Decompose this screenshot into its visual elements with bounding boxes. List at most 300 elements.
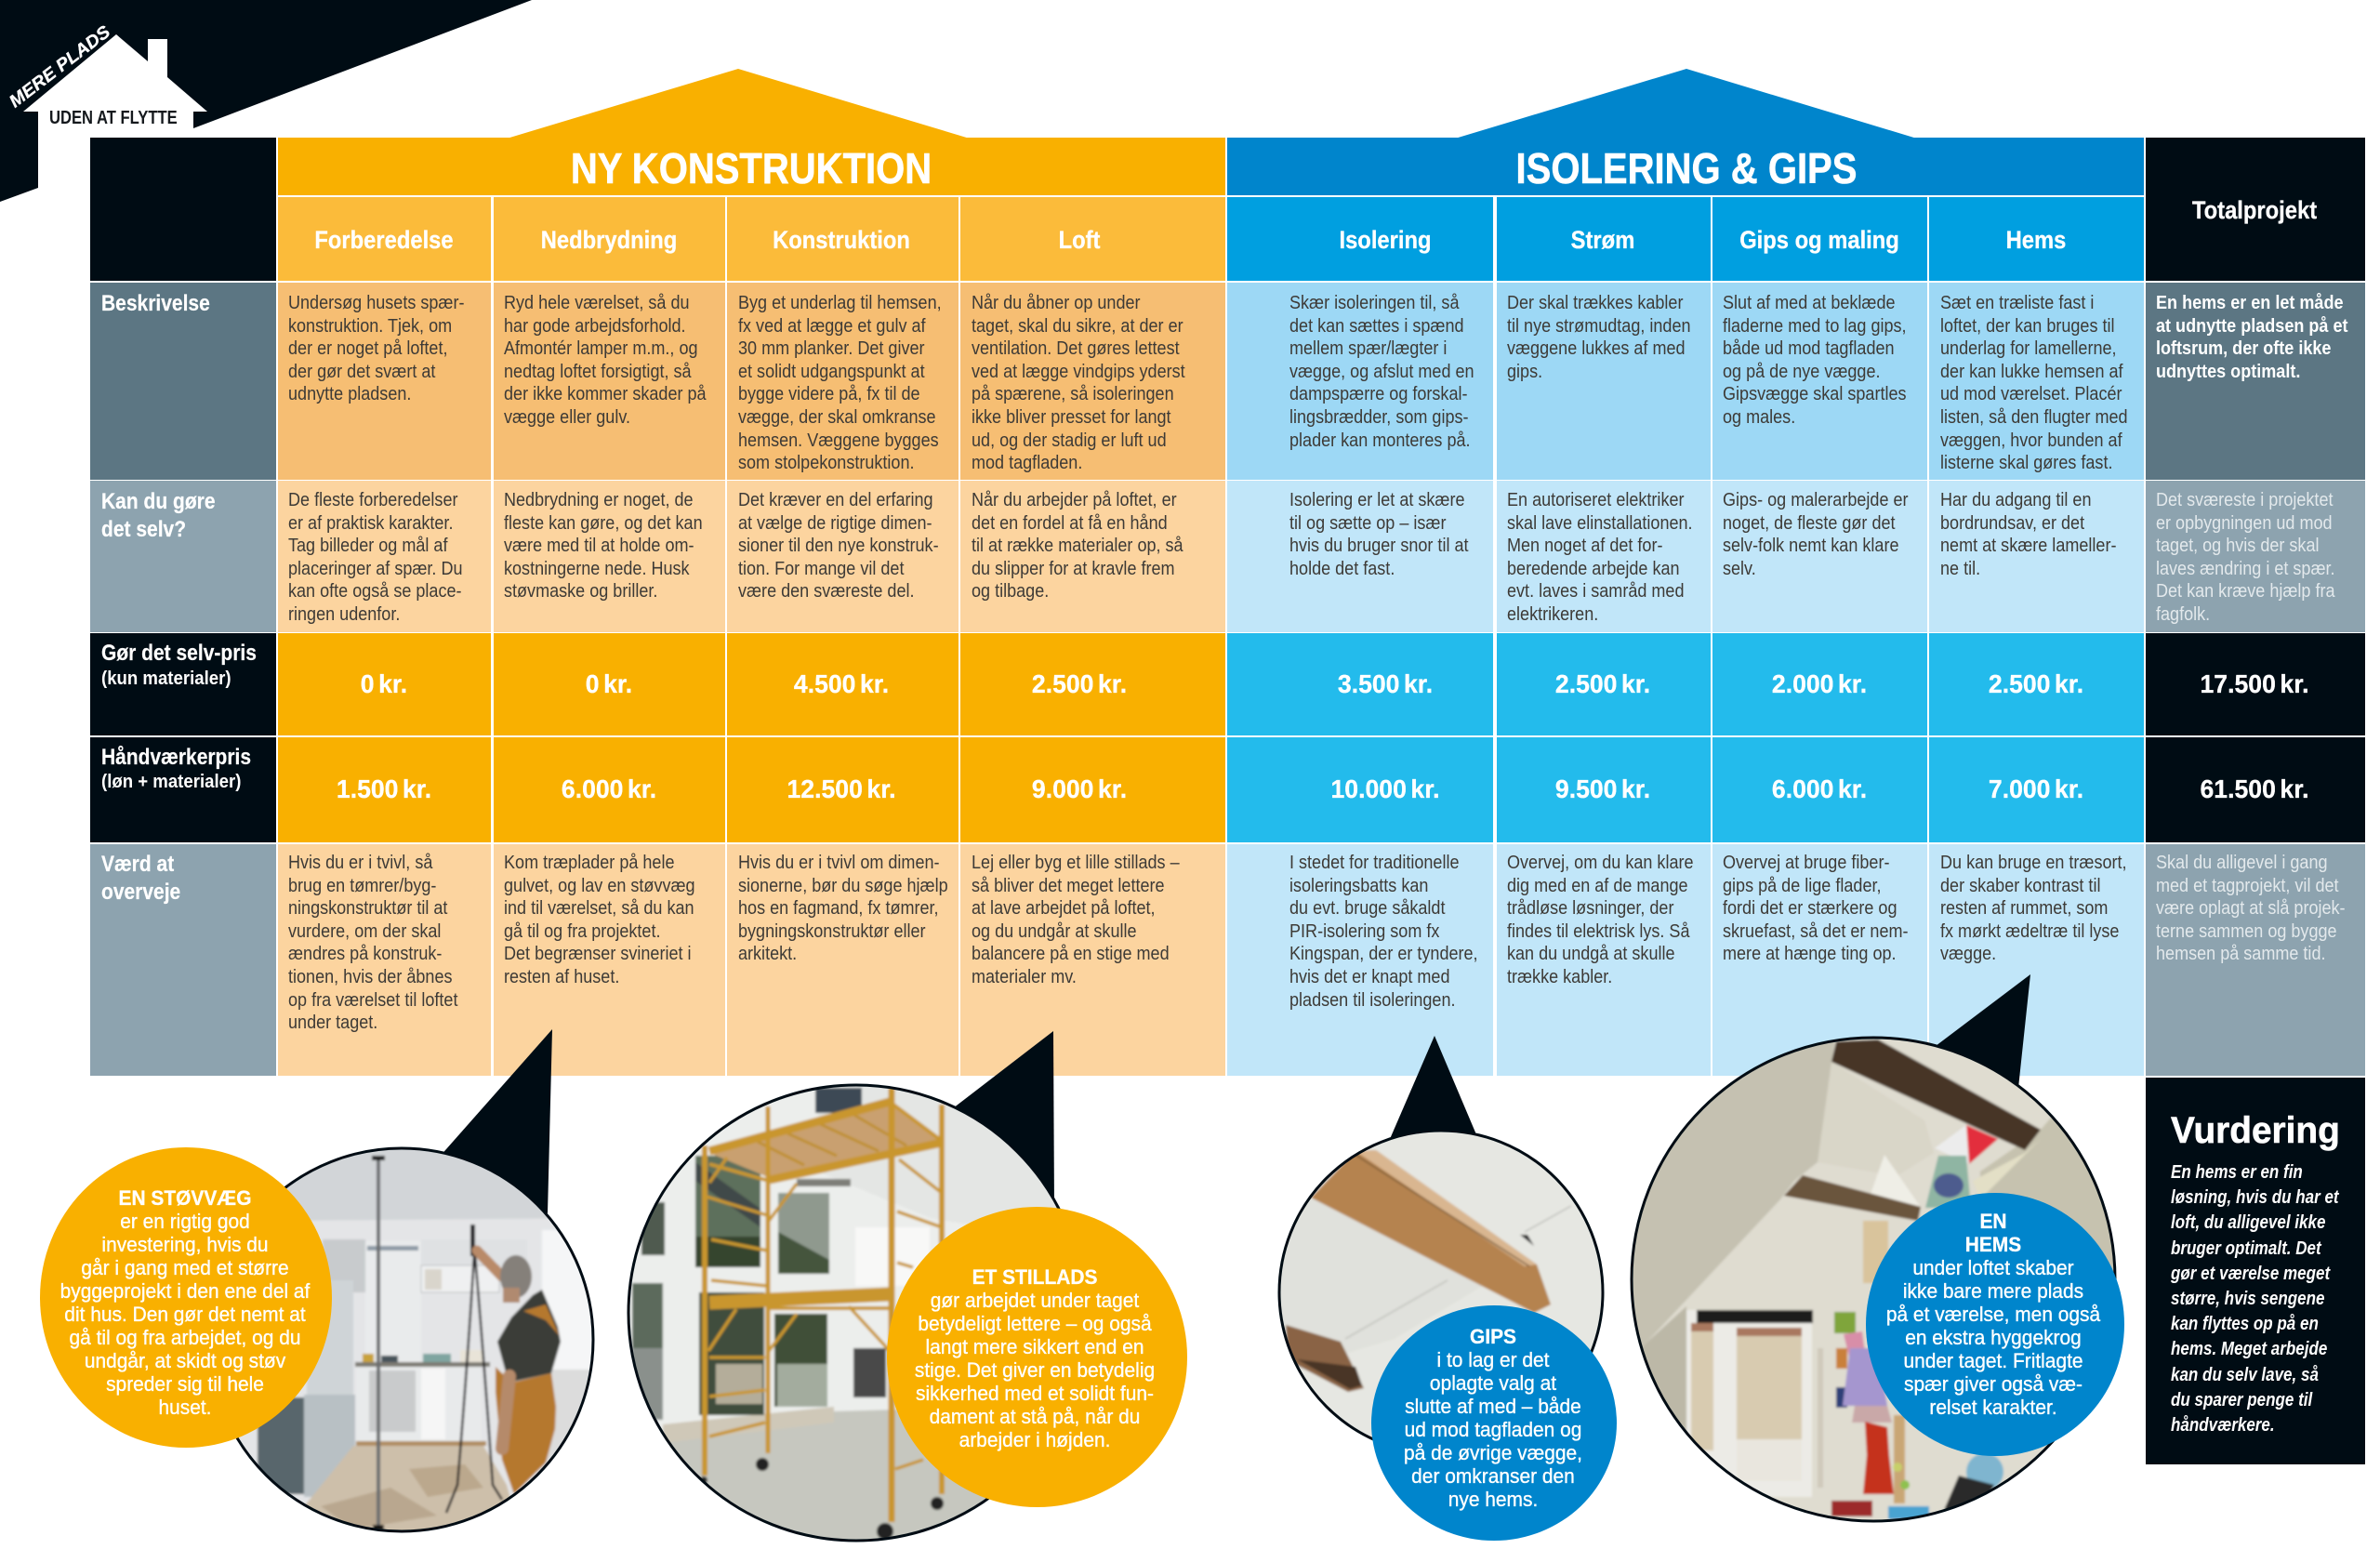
text: hems overveje <box>1929 844 2144 1076</box>
callout bubble: en hems: under loftet skaber <box>1912 1256 2074 1279</box>
price: strøm <box>1497 737 1711 842</box>
row label: beskrivelse <box>90 283 276 480</box>
text: konstruktion overveje: bygningskonstruktør eller <box>738 920 925 942</box>
text: forberedelse beskrivelse: udnytte pladsen. <box>288 383 411 404</box>
text: gips og maling overveje: Overvej at bruge fiber- <box>1723 852 1889 873</box>
banner: ny konstruktion <box>278 138 1225 195</box>
price: loft <box>960 633 1225 735</box>
callout bubble: en hems: relset karakter. <box>1929 1396 2057 1419</box>
text: loft overveje: så bliver det meget lettere <box>972 875 1165 896</box>
text: hems beskrivelse: listen, så den flugter med <box>1940 406 2128 428</box>
text: forberedelse beskrivelse: Undersøg husets spær- <box>288 292 465 313</box>
text: totalprojekt selv: fagfolk. <box>2156 603 2210 625</box>
text: nedbrydning overveje <box>493 844 725 1076</box>
text: vurdering verdict: gør et værelse meget <box>2171 1263 2330 1284</box>
text: gips og maling overveje: gips på de lige flader, <box>1723 875 1882 896</box>
text: vurdering verdict: håndværkere. <box>2171 1414 2275 1436</box>
text: forberedelse selv <box>278 481 491 632</box>
price: forberedelse <box>278 633 491 735</box>
price: gips og maling <box>1712 737 1926 842</box>
text: gips og maling overveje: mere at hænge ting op. <box>1723 943 1897 964</box>
roof: blue gable <box>1458 69 1913 138</box>
text: vurdering verdict: løsning, hvis du har et <box>2171 1186 2339 1208</box>
logo: mere plads house badge <box>0 0 532 202</box>
photo: loft room with exposed rafters <box>1627 1032 2124 1525</box>
row label: kan du gøre det selv: Kan du gøre <box>101 489 216 514</box>
heading: konstruktion: Konstruktion <box>773 226 910 254</box>
heading: strøm: Strøm <box>1571 226 1634 254</box>
text: nedbrydning overveje: gulvet, og lav en støvvæg <box>504 875 695 896</box>
price: total gør det selv <box>2146 633 2365 735</box>
text: loft selv: Når du arbejder på loftet, er <box>972 489 1177 510</box>
text: loft overveje: balancere på en stige med <box>972 943 1170 964</box>
text: strøm beskrivelse: Der skal trækkes kabler <box>1507 292 1683 313</box>
text: loft beskrivelse: ud, og der stadig er luft ud <box>972 430 1167 451</box>
text: totalprojekt beskrivelse: udnyttes optimalt. <box>2156 361 2300 382</box>
text: isolering overveje: I stedet for traditionelle <box>1289 852 1460 873</box>
text: isolering selv: Isolering er let at skære <box>1289 489 1464 510</box>
text: totalprojekt overveje <box>2146 844 2365 1076</box>
text: konstruktion selv: Det kræver en del erfaring <box>738 489 932 510</box>
text: vurdering verdict: loft, du alligevel ikke <box>2171 1211 2325 1233</box>
callout bubble: en støvvæg: dit hus. Den gør det nemt at <box>64 1303 306 1326</box>
text: loft overveje <box>960 844 1225 1076</box>
text: konstruktion beskrivelse: et solidt udgangspunkt at <box>738 361 924 382</box>
callout bubble: et stillads: betydeligt lettere – og også <box>918 1312 1152 1335</box>
text: strøm beskrivelse: væggene lukkes af med <box>1507 338 1686 359</box>
text: konstruktion beskrivelse: hemsen. Væggene bygges <box>738 430 938 451</box>
text: forberedelse overveje: tionen, hvis der åbnes <box>288 966 453 987</box>
text: totalprojekt overveje: Skal du alligevel i gang <box>2156 852 2328 873</box>
text: gips og maling overveje: fordi det er stærkere og <box>1723 897 1897 919</box>
heading: isolering <box>1227 197 1493 281</box>
text: konstruktion selv: at vælge de rigtige dimen- <box>738 512 932 534</box>
heading: nedbrydning: Nedbrydning <box>541 226 677 254</box>
text: loft beskrivelse: ikke bliver presset for langt <box>972 406 1171 428</box>
text: totalprojekt selv: Det kan kræve hjælp fra <box>2156 580 2335 602</box>
text: strøm beskrivelse <box>1497 283 1711 480</box>
text: strøm selv <box>1497 481 1711 632</box>
heading: gips og maling: Gips og maling <box>1739 226 1899 254</box>
callout bubble: gips: ud mod tagfladen og <box>1404 1418 1581 1441</box>
price: forberedelse <box>278 737 491 842</box>
photo: dust wall and worker <box>238 1149 591 1530</box>
text: nedbrydning beskrivelse: har gode arbejdsforhold. <box>504 315 686 337</box>
photo callouts <box>236 974 2116 1542</box>
text: hems selv <box>1929 481 2144 632</box>
text: strøm selv: elektrikeren. <box>1507 603 1598 625</box>
text: totalprojekt overveje: være oplagt at slå projek- <box>2156 897 2346 919</box>
heading: strøm <box>1497 197 1711 281</box>
heading: forberedelse: Forberedelse <box>314 226 454 254</box>
text: vurdering verdict: kan du selv lave, så <box>2171 1364 2319 1385</box>
text: strøm selv: evt. laves i samråd med <box>1507 580 1685 602</box>
text: vurdering verdict <box>2171 1161 2339 1436</box>
text: konstruktion overveje: sionerne, bør du søge hjælp <box>738 875 947 896</box>
text: nedbrydning beskrivelse: Afmontér lamper m.m., og <box>504 338 698 359</box>
text: nedbrydning overveje: ind til værelset, så du kan <box>504 897 694 919</box>
text: isolering selv <box>1227 481 1493 632</box>
banner: isolering og gips: ISOLERING & GIPS <box>1515 143 1857 192</box>
text: hems beskrivelse: loftet, der kan bruges til <box>1940 315 2115 337</box>
price: hems: 7.000 kr. <box>1989 774 2083 803</box>
photo outline: scaffold <box>628 1085 1084 1541</box>
text: konstruktion beskrivelse: som stolpekonstruktion. <box>738 452 914 473</box>
text: isolering overveje: hvis det er knapt med <box>1289 966 1449 987</box>
row: kan du gøre det selv <box>90 481 2365 632</box>
text: hems beskrivelse <box>1929 283 2144 480</box>
text: hems overveje: resten af rummet, som <box>1940 897 2108 919</box>
price: loft: 2.500 kr. <box>1032 669 1127 698</box>
text: forberedelse beskrivelse: der gør det svært at <box>288 361 435 382</box>
text: nedbrydning beskrivelse: nedtag loftet forsigtigt, så <box>504 361 692 382</box>
callout bubble: et stillads: dament at stå på, når du <box>930 1405 1140 1428</box>
callout bubble: et stillads: sikkerhed med et solidt fun- <box>916 1382 1154 1405</box>
text: strøm overveje: kan du undgå at skulle <box>1507 943 1675 964</box>
text: totalprojekt selv: laves ændring i et spær. <box>2156 558 2335 579</box>
text: nedbrydning overveje: gå til og fra projektet. <box>504 920 660 942</box>
text: loft selv: du slipper for at kravle frem <box>972 558 1175 579</box>
callout bubble: en støvvæg <box>40 1147 332 1448</box>
text: strøm overveje: trådløse løsninger, der <box>1507 897 1673 919</box>
price: loft <box>960 737 1225 842</box>
text: isolering beskrivelse: lingsbrædder, som gips- <box>1289 406 1469 428</box>
price: nedbrydning <box>493 737 725 842</box>
callout bubble: en støvvæg: går i gang med et større <box>81 1256 289 1279</box>
text: isolering beskrivelse: Skær isoleringen til, så <box>1289 292 1459 313</box>
callout bubble: gips: på de øvrige vægge, <box>1404 1441 1581 1464</box>
price: gips og maling: 2.000 kr. <box>1772 669 1867 698</box>
price: forberedelse: 1.500 kr. <box>337 774 431 803</box>
text: loft selv: og tilbage. <box>972 580 1049 602</box>
text: vurdering verdict: kan flyttes op på en <box>2171 1313 2319 1334</box>
text: loft beskrivelse: Når du åbner op under <box>972 292 1141 313</box>
text: forberedelse overveje: under taget. <box>288 1012 377 1033</box>
text: isolering overveje: Kingspan, der er tyndere, <box>1289 943 1478 964</box>
text: nedbrydning selv: støvmaske og briller. <box>504 580 657 602</box>
text: hems overveje: fx mørkt ædeltræ til lyse <box>1940 920 2119 942</box>
price: forberedelse: 0 kr. <box>361 669 407 698</box>
price: loft: 9.000 kr. <box>1032 774 1127 803</box>
text: totalprojekt beskrivelse: loftsrum, der ofte ikke <box>2156 338 2331 359</box>
price: isolering: 10.000 kr. <box>1331 774 1439 803</box>
text: hems beskrivelse: ud mod værelset. Placér <box>1940 383 2122 404</box>
roof: orange gable <box>509 69 967 138</box>
text: nedbrydning overveje: Kom træplader på hele <box>504 852 675 873</box>
text: strøm overveje: dig med en af de mange <box>1507 875 1688 896</box>
text: gips og maling overveje <box>1712 844 1926 1076</box>
heading: isolering: Isolering <box>1339 226 1432 254</box>
text: forberedelse selv: ringen udenfor. <box>288 603 400 625</box>
text: forberedelse overveje: brug en tømrer/byg- <box>288 875 436 896</box>
text: forberedelse overveje: ændres på konstruk- <box>288 943 442 964</box>
text: loft selv: til at række materialer op, så <box>972 535 1183 556</box>
heading: loft: Loft <box>1059 226 1100 254</box>
text: hems selv: bordrundsav, er det <box>1940 512 2084 534</box>
text: loft overveje: og du undgår at skulle <box>972 920 1137 942</box>
text: loft selv: det en fordel at få en hånd <box>972 512 1168 534</box>
callout bubble: en hems <box>1866 1193 2124 1456</box>
text: loft selv <box>960 481 1225 632</box>
text: konstruktion selv: sioner til den nye konstruk- <box>738 535 938 556</box>
price: konstruktion: 12.500 kr. <box>787 774 895 803</box>
banner: ny konstruktion: NY KONSTRUKTION <box>571 143 932 192</box>
row label: kan du gøre det selv: det selv? <box>101 517 186 542</box>
callout bubble: et stillads: arbejder i højden. <box>959 1428 1110 1451</box>
text: gips og maling selv: Gips- og malerarbejde er <box>1723 489 1909 510</box>
text: isolering beskrivelse: det kan sættes i spænd <box>1289 315 1464 337</box>
text: konstruktion overveje: arkitekt. <box>738 943 797 964</box>
text: strøm overveje: trække kabler. <box>1507 966 1612 987</box>
pointer: hems <box>1936 974 2030 1088</box>
text: forberedelse selv: De fleste forberedelser <box>288 489 458 510</box>
text: strøm beskrivelse: gips. <box>1507 361 1542 382</box>
text: forberedelse beskrivelse <box>278 283 491 480</box>
text: totalprojekt overveje: hemsen på samme tid. <box>2156 943 2325 964</box>
price: hems: 2.500 kr. <box>1989 669 2083 698</box>
text: hems overveje: der skaber kontrast til <box>1940 875 2100 896</box>
text: hems overveje: vægge. <box>1940 943 1996 964</box>
callout bubble: en støvvæg: gå til og fra arbejdet, og du <box>70 1326 300 1349</box>
text: isolering beskrivelse: mellem spær/lægter i <box>1289 338 1447 359</box>
callout bubble: en hems: HEMS <box>1965 1233 2021 1256</box>
text: isolering selv: hvis du bruger snor til at <box>1289 535 1469 556</box>
callout bubble: en støvvæg: byggeprojekt i den ene del af <box>60 1279 310 1303</box>
text: gips og maling beskrivelse: og males. <box>1723 406 1795 428</box>
text: hems beskrivelse: Sæt en træliste fast i <box>1940 292 2094 313</box>
text: totalprojekt overveje: med et tagprojekt, vil det <box>2156 875 2339 896</box>
text: loft beskrivelse: mod tagfladen. <box>972 452 1082 473</box>
photo: scaffold in white room <box>630 1086 1057 1540</box>
column heading: totalprojekt: Totalprojekt <box>2192 196 2317 224</box>
text: totalprojekt selv: taget, og hvis der skal <box>2156 535 2319 556</box>
text: gips og maling beskrivelse <box>1712 283 1926 480</box>
text: hems beskrivelse: væggen, hvor bunden af <box>1940 430 2122 451</box>
text: isolering overveje: PIR-isolering som fx <box>1289 920 1439 942</box>
text: konstruktion overveje: hos en fagmand, fx tømrer, <box>738 897 938 919</box>
callout bubble: gips: GIPS <box>1469 1325 1516 1348</box>
row label: gør det selv-pris: (kun materialer) <box>101 669 231 689</box>
text: konstruktion beskrivelse <box>727 283 959 480</box>
text: vurdering verdict: bruger optimalt. Det <box>2171 1238 2321 1259</box>
price: gips og maling: 6.000 kr. <box>1772 774 1867 803</box>
heading: nedbrydning <box>493 197 725 281</box>
text: isolering overveje: du evt. bruge såkaldt <box>1289 897 1445 919</box>
text: forberedelse beskrivelse: konstruktion. Tjek, om <box>288 315 452 337</box>
text: forberedelse overveje: ningskonstruktør til at <box>288 897 447 919</box>
price: hems <box>1929 633 2144 735</box>
pointer: gips <box>1390 1036 1478 1139</box>
row label: beskrivelse: Beskrivelse <box>101 291 210 316</box>
text: gips og maling beskrivelse: Gipsvægge skal spartles <box>1723 383 1907 404</box>
price: total gør det selv: 17.500 kr. <box>2201 669 2308 698</box>
callout bubble: en hems: en ekstra hyggekrog <box>1905 1326 2082 1349</box>
text: isolering beskrivelse: dampspærre og forskal- <box>1289 383 1468 404</box>
text: totalprojekt beskrivelse: En hems er en let måde <box>2156 292 2344 313</box>
text: loft beskrivelse: taget, skal du sikre, at der er <box>972 315 1183 337</box>
price: konstruktion <box>727 737 959 842</box>
price: strøm: 9.500 kr. <box>1555 774 1650 803</box>
callout bubble: et stillads: ET STILLADS <box>972 1265 1097 1289</box>
price: konstruktion <box>727 633 959 735</box>
row: håndværkerpris <box>90 737 2365 842</box>
text: nedbrydning selv: fleste kan gøre, og det kan <box>504 512 703 534</box>
callout bubble: gips: nye hems. <box>1448 1488 1538 1511</box>
callout bubble: en hems: under taget. Fritlagte <box>1903 1349 2083 1372</box>
row: column headers <box>278 197 2144 281</box>
callout bubble: en støvvæg: spreder sig til hele <box>106 1372 264 1396</box>
text: gips og maling selv: noget, de fleste gør det <box>1723 512 1896 534</box>
text: forberedelse overveje: vurdere, om der skal <box>288 920 441 942</box>
heading: vurdering: Vurdering <box>2171 1110 2340 1151</box>
text: gips og maling selv <box>1712 481 1926 632</box>
price: nedbrydning <box>493 633 725 735</box>
photo outline: loft room <box>1632 1038 2115 1521</box>
text: konstruktion selv <box>727 481 959 632</box>
text: gips og maling beskrivelse: både ud mod tagfladen <box>1723 338 1895 359</box>
text: gips og maling selv: selv-folk nemt kan klare <box>1723 535 1899 556</box>
price: total håndværker: 61.500 kr. <box>2201 774 2308 803</box>
text: hems beskrivelse: underlag for lamellerne, <box>1940 338 2117 359</box>
text: strøm overveje: findes til elektrisk lys. Så <box>1507 920 1690 942</box>
price: hems <box>1929 737 2144 842</box>
text: isolering selv: holde det fast. <box>1289 558 1395 579</box>
text: konstruktion overveje: Hvis du er i tvivl om dimen- <box>738 852 939 873</box>
text: forberedelse selv: Tag billeder og mål af <box>288 535 447 556</box>
row label: værd at overveje: Værd at <box>101 852 174 877</box>
heading: forberedelse <box>278 197 491 281</box>
text: hems beskrivelse: listerne skal gøres fast. <box>1940 452 2112 473</box>
price: strøm: 2.500 kr. <box>1555 669 1650 698</box>
text: forberedelse selv: er af praktisk karakter. <box>288 512 453 534</box>
callout bubble: en støvvæg: huset. <box>158 1396 211 1419</box>
text: totalprojekt selv: er opbygningen ud mod <box>2156 512 2333 534</box>
text: vurdering verdict: du sparer penge til <box>2171 1389 2312 1410</box>
photo: plasterboard and beams <box>1281 1132 1601 1437</box>
text: strøm beskrivelse: til nye strømudtag, inden <box>1507 315 1691 337</box>
text: forberedelse selv: kan ofte også se place- <box>288 580 462 602</box>
photo outline: plasterboard <box>1279 1131 1603 1454</box>
text: totalprojekt selv: Det sværeste i projektet <box>2156 489 2334 510</box>
text: strøm selv: skal lave elinstallationen. <box>1507 512 1693 534</box>
callout bubble: en hems: spær giver også væ- <box>1904 1372 2082 1396</box>
text: hems selv: nemt at skære lameller- <box>1940 535 2116 556</box>
text: nedbrydning selv <box>493 481 725 632</box>
text: forberedelse overveje: Hvis du er i tvivl, så <box>288 852 432 873</box>
text: nedbrydning overveje: resten af huset. <box>504 966 619 987</box>
text: gips og maling beskrivelse: fladerne med to lag gips, <box>1723 315 1907 337</box>
heading: hems: Hems <box>2006 226 2066 254</box>
logo: mere plads house badge: UDEN AT FLYTTE <box>49 108 178 128</box>
text: konstruktion beskrivelse: 30 mm planker. Det giver <box>738 338 924 359</box>
text: hems beskrivelse: der kan lukke hemsen af <box>1940 361 2123 382</box>
price: gips og maling <box>1712 633 1926 735</box>
text: strøm selv: Men noget af det for- <box>1507 535 1662 556</box>
row label: værd at overveje: overveje <box>101 880 180 905</box>
text: gips og maling overveje: skruefast, så det er nem- <box>1723 920 1909 942</box>
row label: gør det selv-pris <box>90 633 276 735</box>
text: isolering overveje <box>1227 844 1493 1076</box>
text: loft beskrivelse: ved at lægge vindgips yderst <box>972 361 1185 382</box>
text: vurdering verdict: større, hvis sengene <box>2171 1288 2324 1309</box>
text: forberedelse selv: placeringer af spær. Du <box>288 558 463 579</box>
text: gips og maling selv: selv. <box>1723 558 1756 579</box>
text: konstruktion selv: være den sværeste del. <box>738 580 914 602</box>
text: nedbrydning selv: Nedbrydning er noget, de <box>504 489 694 510</box>
text: isolering beskrivelse: plader kan monteres på. <box>1289 430 1471 451</box>
photo outline: dust wall <box>210 1148 593 1531</box>
text: nedbrydning overveje: Det begrænser svineriet i <box>504 943 692 964</box>
price: total håndværker <box>2146 737 2365 842</box>
text: konstruktion beskrivelse: vægge, der skal omkranse <box>738 406 935 428</box>
pointer: støvvæg <box>439 1029 552 1213</box>
heading: konstruktion <box>727 197 959 281</box>
callout bubble: gips: slutte af med – både <box>1405 1395 1580 1418</box>
text: nedbrydning beskrivelse: vægge eller gulv. <box>504 406 630 428</box>
callout bubble: en støvvæg: investering, hvis du <box>101 1233 269 1256</box>
text: loft beskrivelse <box>960 283 1225 480</box>
callout bubble: gips <box>1371 1305 1617 1541</box>
heading: hems <box>1929 197 2144 281</box>
text: strøm overveje <box>1497 844 1711 1076</box>
text: totalprojekt beskrivelse: at udnytte pladsen på et <box>2156 315 2347 337</box>
callout bubble: en hems: på et værelse, men også <box>1886 1303 2100 1326</box>
text: hems overveje: Du kan bruge en træsort, <box>1940 852 2127 873</box>
callout bubble: gips: i to lag er det <box>1436 1348 1549 1371</box>
text: isolering beskrivelse <box>1227 283 1493 480</box>
text: nedbrydning beskrivelse <box>493 283 725 480</box>
logo: mere plads house badge: MERE PLADS <box>6 22 114 113</box>
empty black corner cell <box>90 138 276 281</box>
callout bubble: gips: oplagte valg at <box>1429 1371 1556 1395</box>
text: loft overveje: Lej eller byg et lille stillads – <box>972 852 1180 873</box>
callout bubble: en hems: EN <box>1979 1210 2007 1233</box>
callout bubble: et stillads: gør arbejdet under taget <box>931 1289 1139 1312</box>
text: loft beskrivelse: på spærene, så isoleringen <box>972 383 1174 404</box>
row: beskrivelse <box>90 283 2365 480</box>
text: forberedelse overveje: op fra værelset til loftet <box>288 989 457 1011</box>
row label: håndværkerpris: (løn + materialer) <box>101 772 241 792</box>
text: forberedelse overveje <box>278 844 491 1076</box>
text: nedbrydning beskrivelse: Ryd hele værelset, så du <box>504 292 690 313</box>
row label: gør det selv-pris: Gør det selv-pris <box>101 641 257 666</box>
text: loft overveje: materialer mv. <box>972 966 1077 987</box>
price: nedbrydning: 6.000 kr. <box>562 774 656 803</box>
text: hems selv: ne til. <box>1940 558 1980 579</box>
text: isolering beskrivelse: vægge, og afslut med en <box>1289 361 1474 382</box>
text: isolering overveje: isoleringsbatts kan <box>1289 875 1428 896</box>
text: gips og maling beskrivelse: og på de nye vægge. <box>1723 361 1881 382</box>
heading: gips og maling <box>1712 197 1926 281</box>
text: totalprojekt beskrivelse <box>2146 283 2365 480</box>
text: konstruktion beskrivelse: bygge videre på, fx til de <box>738 383 919 404</box>
text: loft overveje: at lave arbejdet på loftet, <box>972 897 1156 919</box>
price: nedbrydning: 0 kr. <box>586 669 632 698</box>
text: konstruktion beskrivelse: Byg et underlag til hemsen, <box>738 292 941 313</box>
text: loft beskrivelse: ventilation. Det gøres lettest <box>972 338 1180 359</box>
text: isolering overveje: pladsen til isoleringen. <box>1289 989 1456 1011</box>
text: totalprojekt selv <box>2146 481 2365 632</box>
text: totalprojekt overveje: terne sammen og bygge <box>2156 920 2337 942</box>
text: nedbrydning beskrivelse: der ikke kommer skader på <box>504 383 707 404</box>
callout bubble: et stillads: stige. Det giver en betydelig <box>915 1358 1155 1382</box>
text: vurdering verdict: En hems er en fin <box>2171 1161 2303 1183</box>
banner: isolering og gips <box>1227 138 2144 195</box>
price: konstruktion: 4.500 kr. <box>794 669 889 698</box>
price: isolering <box>1227 737 1493 842</box>
row: gør det selv-pris <box>90 633 2365 735</box>
callout bubble: gips: der omkranser den <box>1411 1464 1574 1488</box>
